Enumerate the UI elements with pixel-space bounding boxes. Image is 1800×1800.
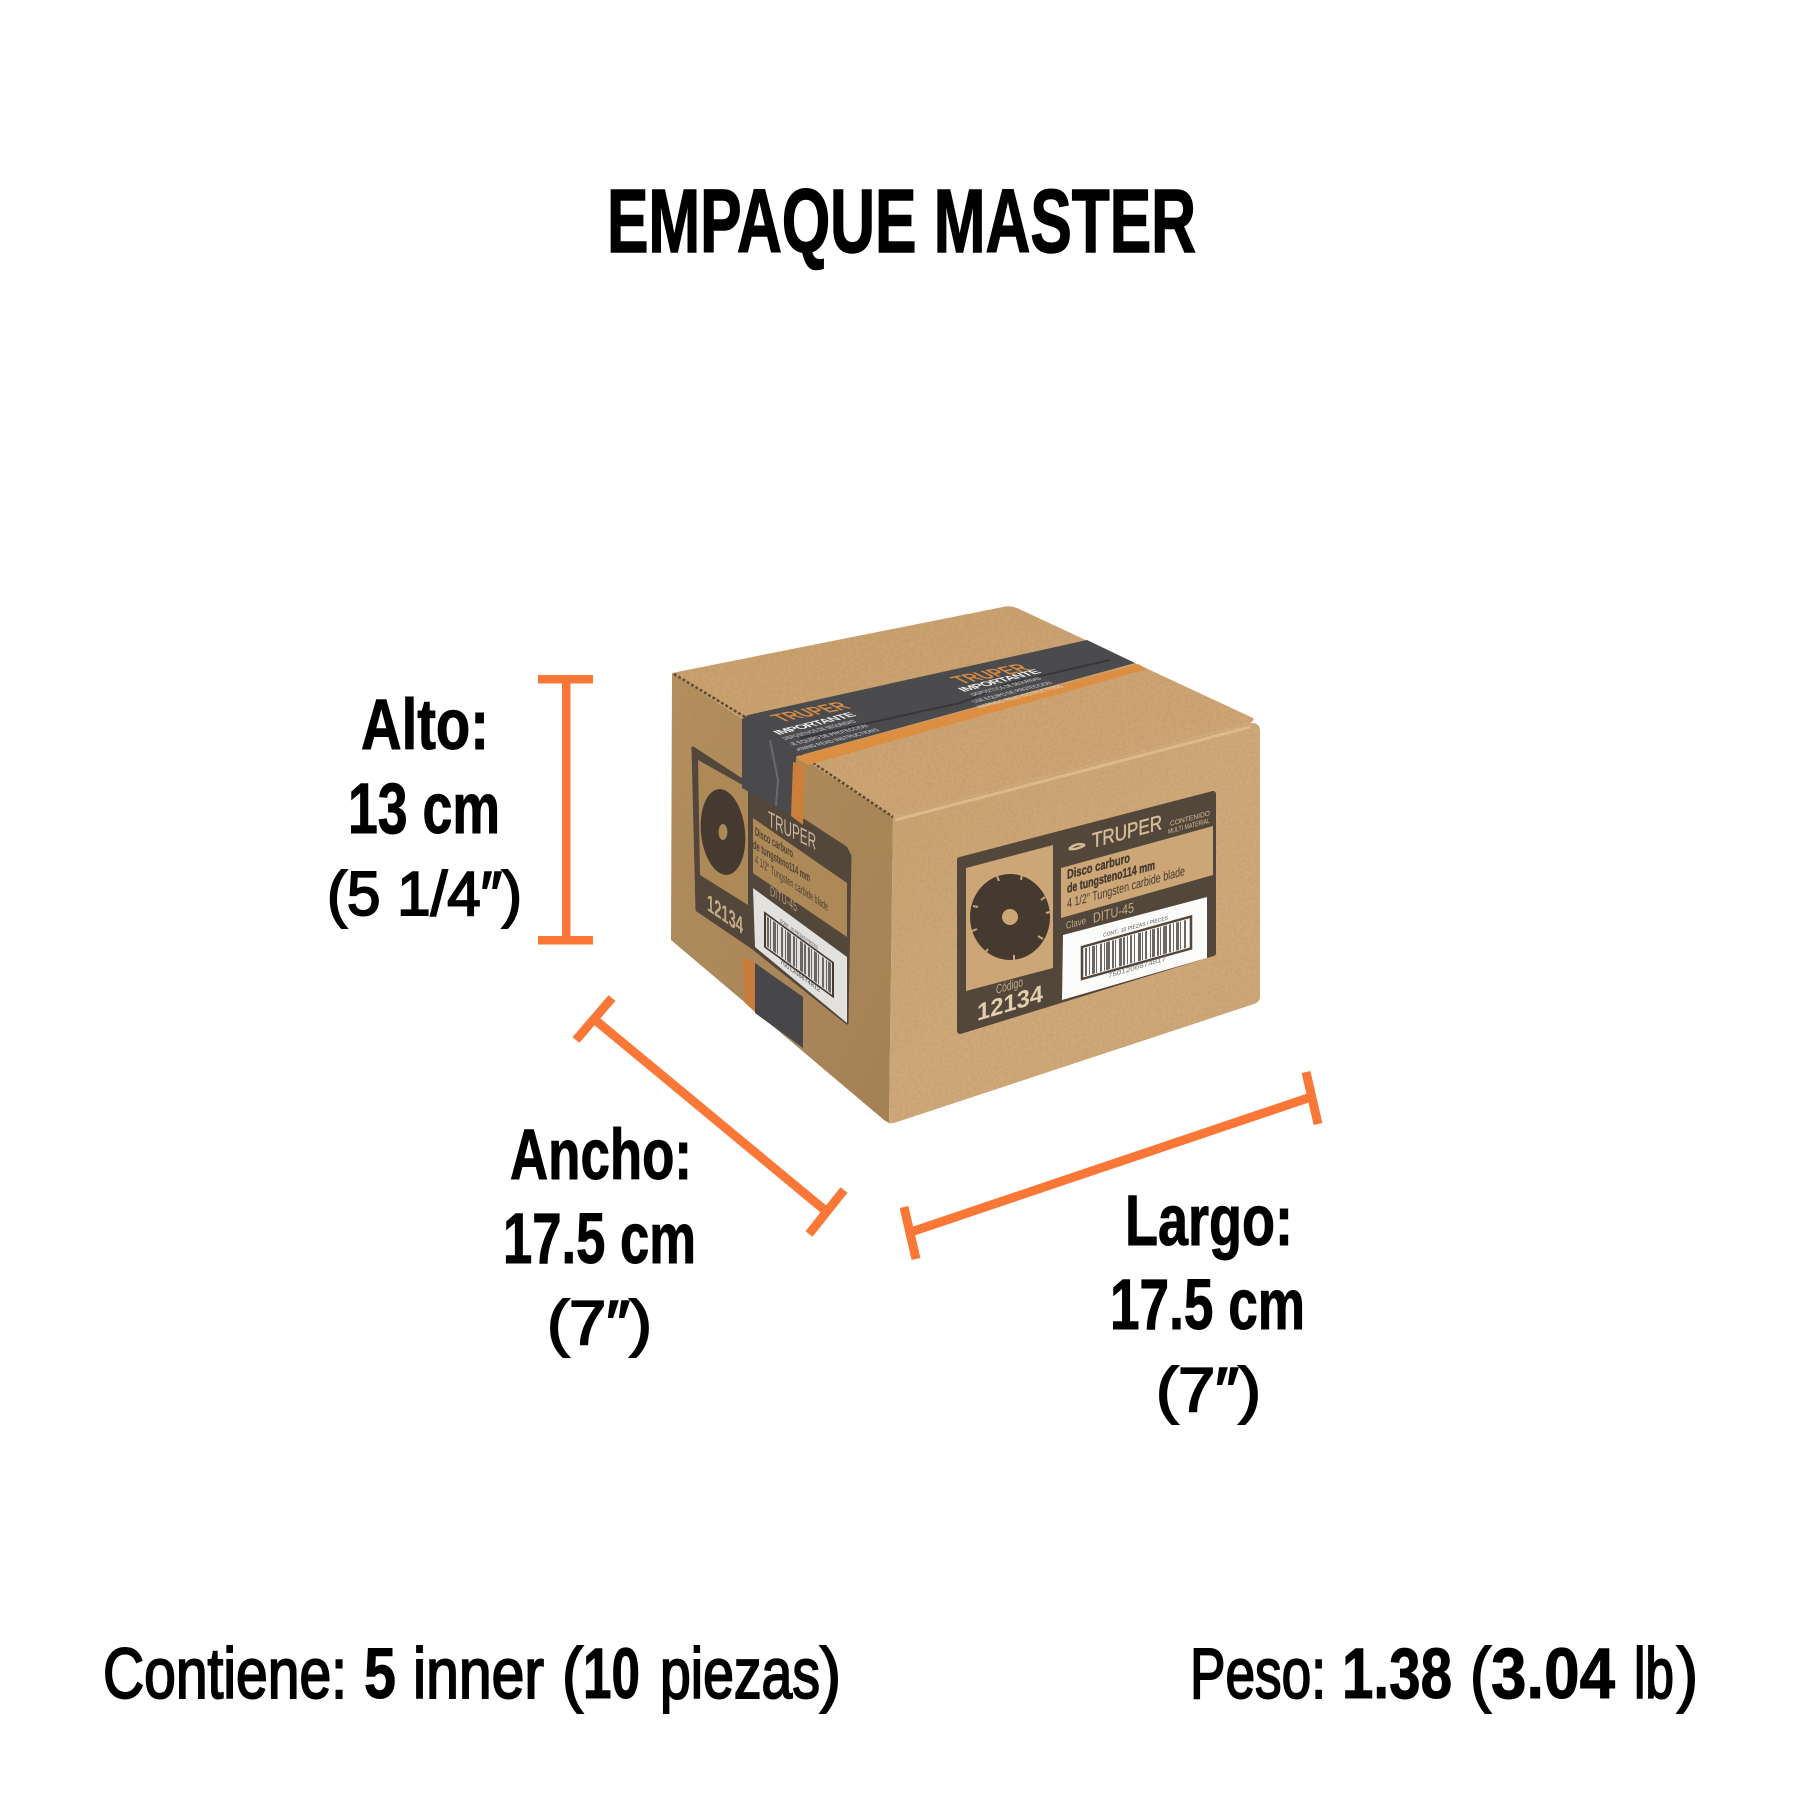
- label on left face: 12134: [707, 888, 743, 940]
- width label: Ancho:: [510, 1116, 692, 1195]
- fold highlight: [895, 727, 1250, 820]
- length label: Largo:: [1125, 1182, 1293, 1261]
- label on right face: Clave: [1066, 916, 1086, 932]
- weight line: ): [1677, 1635, 1698, 1714]
- label on right face: de tungsteno114 mm: [1067, 857, 1155, 896]
- box left face: [671, 673, 893, 1123]
- weight line: lb: [1634, 1635, 1674, 1714]
- label on left face: [693, 748, 850, 1023]
- label on right face: 4 1/2″ Tungsten carbide blade: [1067, 863, 1185, 911]
- label on left face: TRUPER: [768, 806, 816, 855]
- contents line: inner: [413, 1635, 544, 1714]
- length label: (7″): [1156, 1356, 1261, 1425]
- label on right face: 7501206674817: [1108, 956, 1166, 980]
- label on right face: Disco carburo: [1067, 850, 1130, 882]
- product box photo: [660, 600, 1270, 1130]
- tape on left face: [742, 715, 805, 1048]
- width dimension marker: [576, 998, 844, 1234]
- contents line: 10: [583, 1635, 640, 1714]
- label on left face: DITU-45: [770, 883, 797, 916]
- packing tape on top: USE EQUIPO DE PROTECCION: [969, 681, 1055, 704]
- packing tape on top: TRUPER: [944, 661, 1036, 686]
- length label: [1110, 1182, 1305, 1425]
- flap edge: [674, 674, 893, 817]
- packing tape on top: DISPOSITIVOS DE SEGURIDAD: [779, 719, 859, 741]
- cardboard grain: [698, 615, 1260, 1122]
- length dimension marker: [904, 1072, 1318, 1259]
- height label: [327, 686, 522, 929]
- contents line: piezas: [660, 1635, 820, 1714]
- label on left face: Disco carburo: [755, 824, 793, 861]
- height label: 13 cm: [348, 770, 500, 849]
- label on right face: 12134: [977, 981, 1043, 1027]
- height label: (5 1/4″): [327, 860, 522, 929]
- weight line: (: [1470, 1635, 1491, 1714]
- TRUPER logo mark: [1069, 844, 1085, 849]
- box top face: [672, 606, 1254, 817]
- weight line: 1.38: [1342, 1635, 1452, 1714]
- label on right face: DITU-45: [1093, 900, 1134, 927]
- label on right face: TRUPER: [1092, 810, 1162, 853]
- contents line: 5: [364, 1635, 396, 1714]
- packing tape on top: WARNING READ INSTRUCTIONS: [974, 684, 1066, 709]
- weight line: [1190, 1635, 1698, 1714]
- title: EMPAQUE MASTER: [607, 172, 1196, 272]
- contents line: (: [562, 1635, 583, 1714]
- packing tape on top: IMPORTANTE: [955, 668, 1044, 693]
- label on right face: [960, 794, 1213, 1031]
- label on right face: CONTENIDO: [1170, 809, 1210, 828]
- packing tape on top: WARNING READ INSTRUCTIONS: [784, 728, 882, 754]
- contents line: [103, 1635, 841, 1714]
- infographic: [105, 188, 1695, 1714]
- height dimension marker: [538, 675, 593, 944]
- packing tape on top: USE EQUIPO DE PROTECCION: [781, 724, 871, 748]
- width label: [503, 1116, 696, 1358]
- label on right face: Código: [996, 974, 1023, 997]
- label on right face: CONT.: 10 PIEZAS / PIECES: [1103, 915, 1168, 939]
- packing tape on top: IMPORTANTE: [770, 711, 859, 736]
- contents line: ): [820, 1635, 841, 1714]
- label on left face: 7501206674812: [780, 959, 820, 994]
- length label: 17.5 cm: [1110, 1266, 1305, 1345]
- label on left face: CONT. 10 PIEZAS PIECES: [780, 918, 818, 952]
- packing tape on top: [748, 640, 1147, 765]
- label on right face: MULTI MATERIAL: [1168, 817, 1210, 836]
- contents line: Contiene:: [103, 1635, 347, 1714]
- packing tape on top: TRUPER: [764, 699, 856, 724]
- width label: (7″): [547, 1289, 652, 1358]
- label on left face: 4 1/2″ Tungsten carbide blade: [755, 852, 828, 914]
- box right face: [889, 723, 1260, 1123]
- packing tape on top: DISPOSITIVOS DE SEGURIDAD: [968, 676, 1044, 697]
- label on left face: de tungsteno114 mm: [753, 837, 810, 885]
- weight line: Peso:: [1190, 1635, 1326, 1714]
- width label: 17.5 cm: [503, 1200, 696, 1279]
- weight line: 3.04: [1491, 1635, 1615, 1714]
- height label: Alto:: [361, 686, 489, 765]
